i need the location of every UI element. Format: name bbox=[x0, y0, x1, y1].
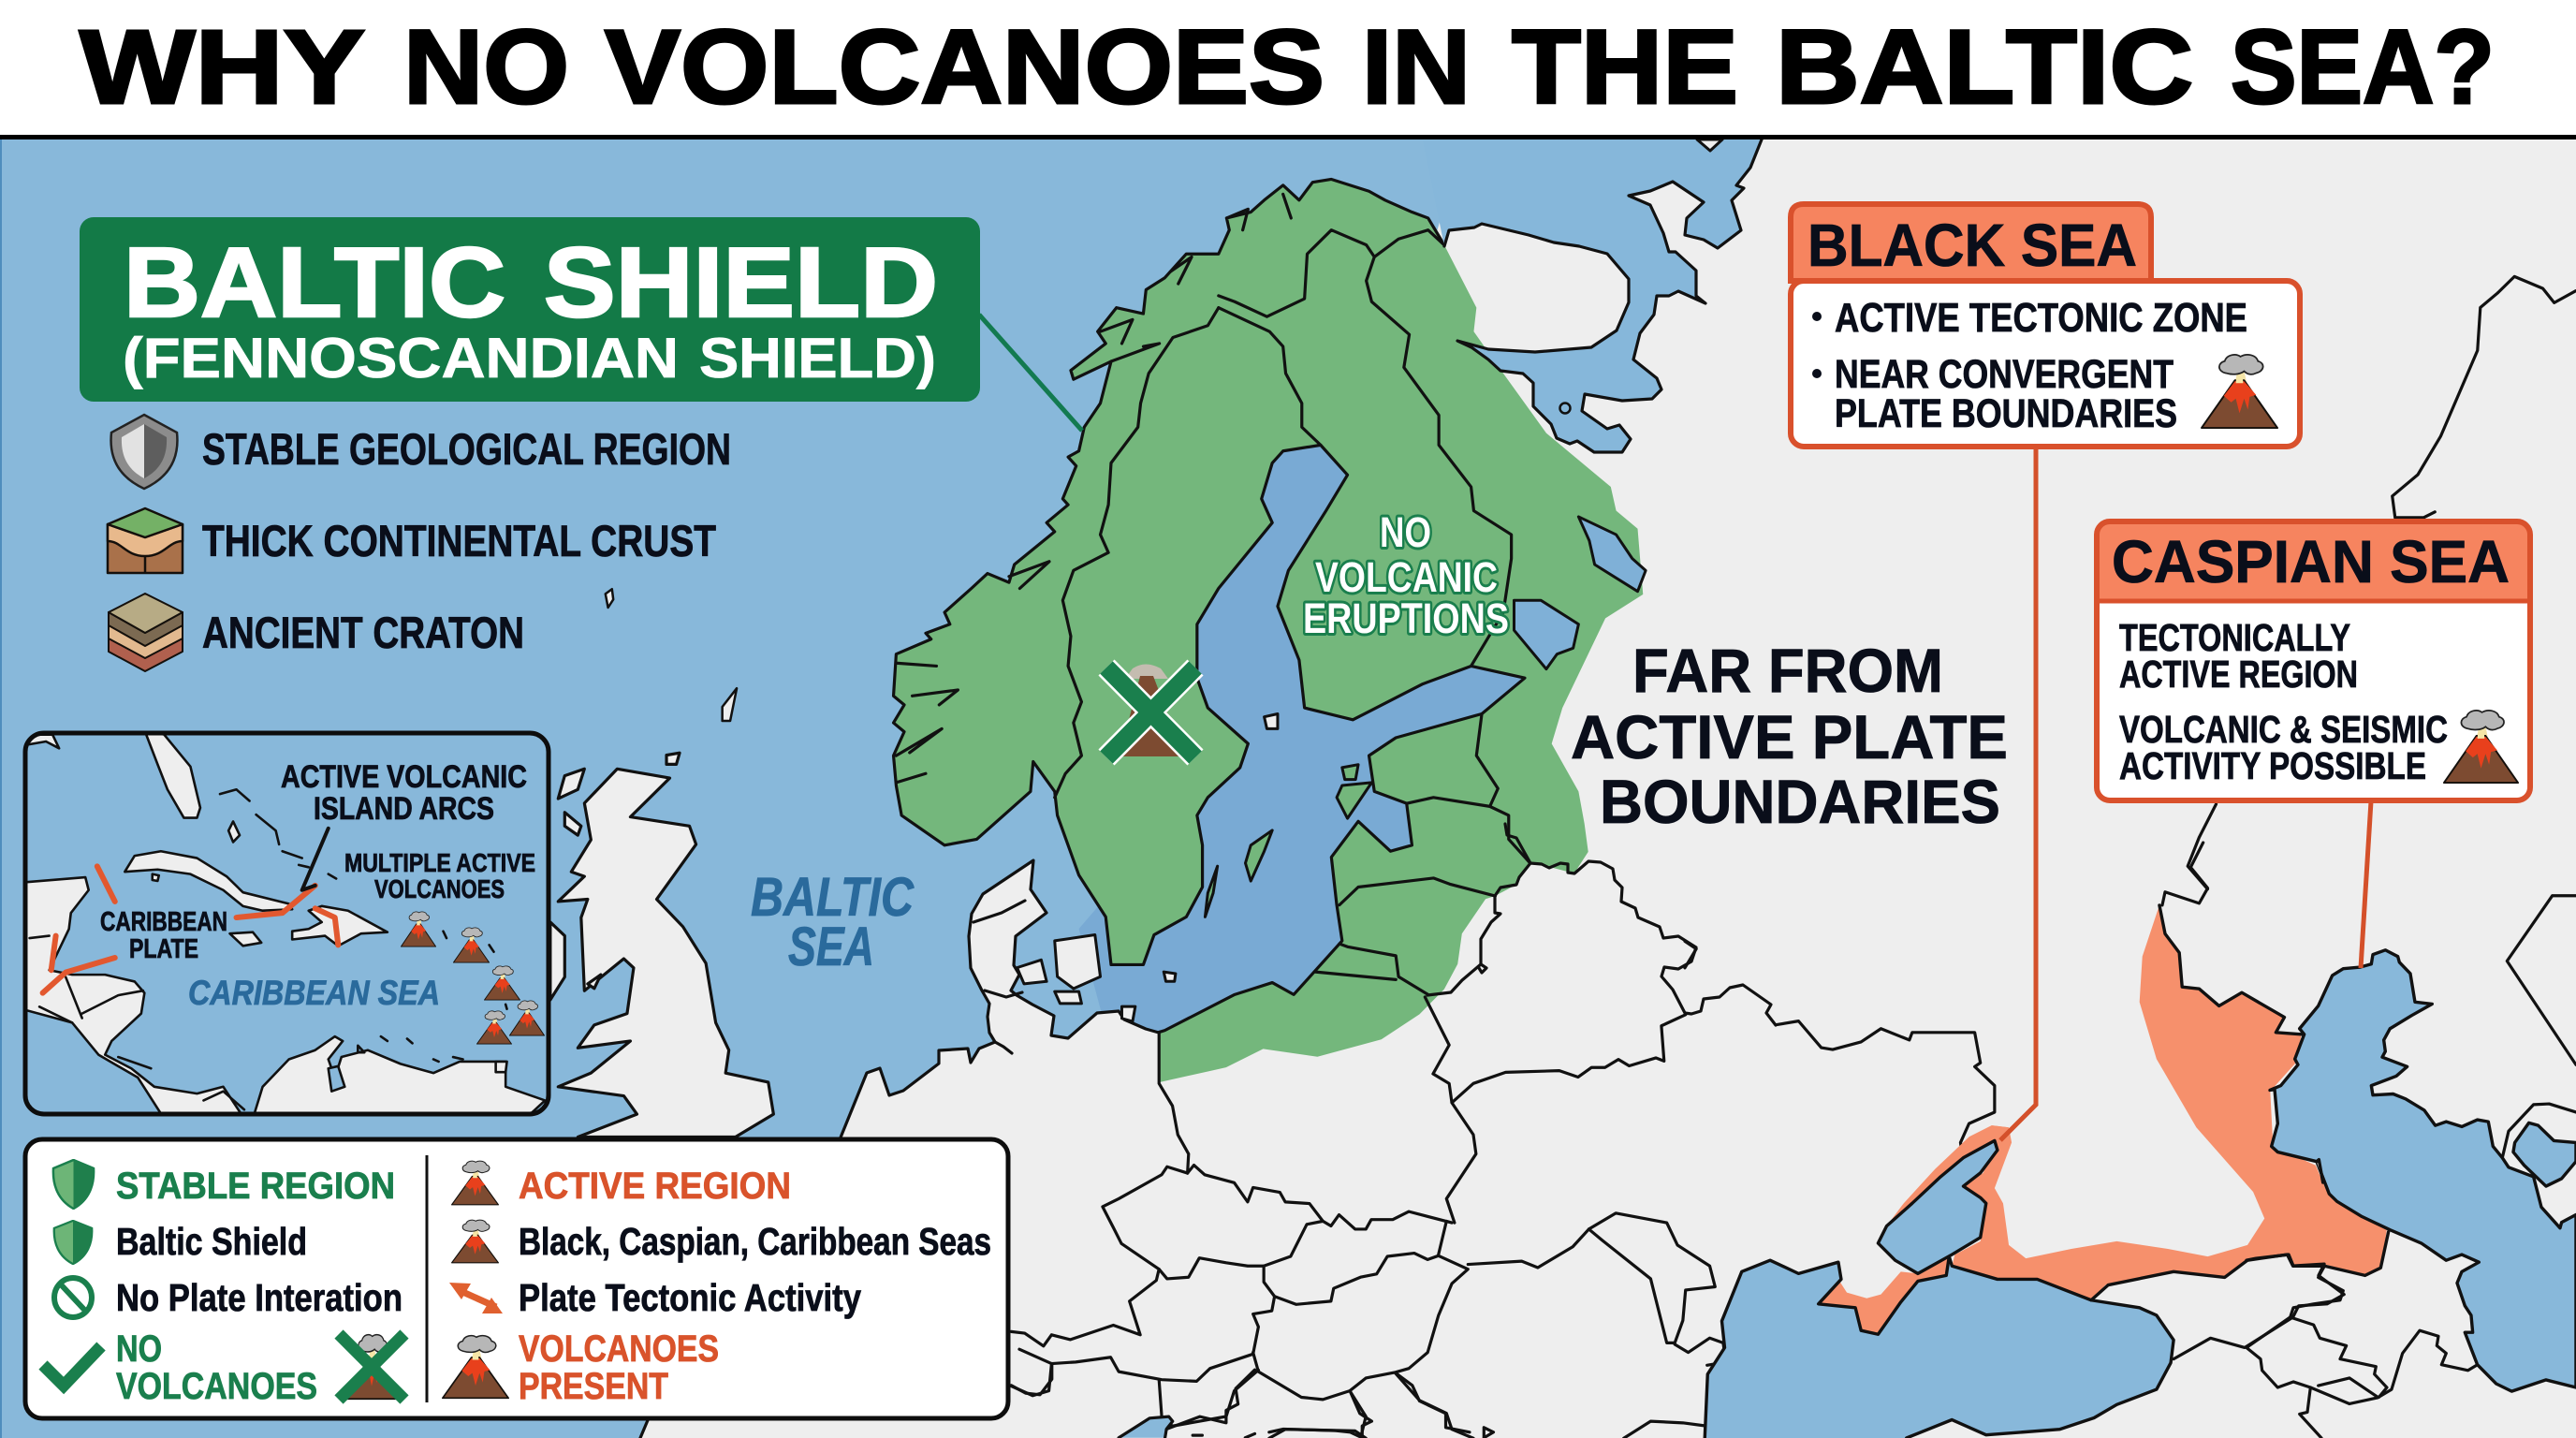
text: tectonically active region bbox=[2119, 616, 2358, 696]
inset: Caribbean land masses bbox=[13, 730, 545, 1119]
legend icon: plate tectonic arrow bbox=[449, 1283, 503, 1313]
inset: Caribbean plate label: PLATE bbox=[129, 934, 198, 964]
inset: Caribbean plate label: CARIBBEAN bbox=[100, 907, 227, 937]
legend icon: check mark bbox=[43, 1346, 101, 1386]
text: volcanic and seismic activity possible: VOLCANIC & SEISMIC bbox=[2119, 708, 2448, 751]
title bbox=[80, 8, 2495, 125]
panel: Caspian Sea callout bbox=[2097, 521, 2530, 800]
heading: Black Sea: BLACK SEA bbox=[1808, 212, 2137, 279]
map: Black and Caspian active zone in orange bbox=[1819, 905, 2387, 1334]
inset: Caribbean plate label bbox=[100, 907, 227, 964]
panel: Black Sea callout bbox=[1791, 204, 2300, 447]
leader: Caspian Sea callout bbox=[2361, 801, 2371, 968]
text: volcanic and seismic activity possible bbox=[2119, 708, 2448, 787]
label: no volcanic eruptions: NO bbox=[1380, 508, 1431, 556]
map: Caspian Sea bbox=[2247, 950, 2576, 1391]
map: Baltic Shield green region over Fennoscandia bbox=[894, 179, 1643, 1082]
label: Baltic Sea bbox=[751, 867, 915, 977]
inset: active volcanic island arcs label: ISLAND ARCS bbox=[314, 791, 494, 827]
legend text: no volcanoes bbox=[116, 1328, 317, 1407]
title: VOLCANOES bbox=[605, 8, 1325, 125]
legend icon: no sign bbox=[54, 1278, 92, 1317]
label: no volcanic eruptions bbox=[1303, 508, 1509, 642]
inset: plate boundaries in orange bbox=[43, 866, 338, 993]
map: islands in the Baltic bbox=[1017, 713, 1371, 1021]
connector: Baltic Shield label to Scandinavia bbox=[979, 315, 1082, 431]
legend text: seas: Black, Caspian, Caribbean Seas bbox=[519, 1220, 991, 1263]
icon: volcano bbox=[2202, 355, 2277, 428]
panel: Baltic Shield label bbox=[80, 217, 980, 402]
title: IN bbox=[1362, 8, 1471, 125]
icon: ancient craton block bbox=[109, 594, 183, 671]
text: volcanic and seismic activity possible: ACTIVITY POSSIBLE bbox=[2119, 744, 2426, 787]
title: SEA? bbox=[2231, 8, 2495, 125]
legend icon: large volcano bbox=[443, 1336, 508, 1398]
legend text: active region: ACTIVE REGION bbox=[519, 1166, 791, 1207]
icon: stable region shield bbox=[111, 415, 177, 489]
panel: Caribbean inset map bbox=[13, 730, 549, 1119]
map: Adriatic Sea bbox=[1119, 1416, 1173, 1438]
inset: volcano icons bbox=[401, 912, 545, 1044]
text: near convergent plate boundaries: NEAR CONVERGENT bbox=[1835, 352, 2174, 397]
legend icon: crossed volcano bbox=[339, 1334, 404, 1400]
map: lakes Ladoga and Onega bbox=[1515, 517, 1646, 669]
legend text: no volcanoes: VOLCANOES bbox=[116, 1366, 317, 1407]
map: coastlines and country borders bbox=[640, 179, 2576, 1438]
title: THE bbox=[1512, 8, 1738, 125]
legend text: plate tectonic activity: Plate Tectonic Activity bbox=[519, 1276, 861, 1319]
legend icon: Baltic Shield bbox=[54, 1221, 92, 1264]
header divider bbox=[0, 135, 2576, 139]
inset: frame bbox=[25, 733, 549, 1114]
map: Great Britain and Ireland bbox=[550, 753, 773, 1137]
inset: leader to island arcs bbox=[302, 829, 329, 890]
text: thick continental crust: THICK CONTINENTAL CRUST bbox=[202, 516, 716, 565]
legend icon: active volcano bbox=[452, 1161, 498, 1205]
legend icon: stable shield bbox=[53, 1160, 94, 1209]
label: Baltic Sea: BALTIC bbox=[751, 867, 915, 928]
inset: active volcanic island arcs label: ACTIVE VOLCANIC bbox=[281, 759, 527, 795]
title: WHY bbox=[80, 8, 365, 125]
small North Sea islands bbox=[606, 589, 737, 721]
legend text: stable region: STABLE REGION bbox=[116, 1166, 395, 1207]
legend text: volcanoes present: PRESENT bbox=[519, 1366, 668, 1407]
inset: active volcanic island arcs label bbox=[281, 759, 527, 827]
legend text: no plate interaction: No Plate Interation bbox=[116, 1276, 402, 1319]
panel: Baltic Shield label: SHIELD) bbox=[699, 327, 936, 389]
title: NO bbox=[403, 8, 569, 125]
inset: multiple active volcanoes label: VOLCANOES bbox=[374, 874, 505, 903]
text: ancient craton: ANCIENT CRATON bbox=[202, 608, 524, 657]
legend text: Baltic Shield: Baltic Shield bbox=[116, 1220, 307, 1263]
text: active tectonic zone: ACTIVE TECTONIC ZONE bbox=[1835, 295, 2247, 341]
text: near convergent plate boundaries: PLATE BOUNDARIES bbox=[1835, 391, 2177, 436]
icon: volcano bbox=[2444, 711, 2518, 783]
text: stable geological region: STABLE GEOLOGICAL REGION bbox=[202, 424, 731, 474]
callout: far from active plate boundaries: FAR FROM bbox=[1632, 636, 1943, 705]
label: no volcanic eruptions: VOLCANIC bbox=[1315, 553, 1498, 601]
panel: Baltic Shield label: BALTIC bbox=[124, 227, 505, 338]
panel: Baltic Shield label: SHIELD bbox=[544, 227, 938, 338]
inset: Caribbean Sea label: CARIBBEAN SEA bbox=[188, 974, 440, 1012]
heading: Caspian Sea: CASPIAN SEA bbox=[2112, 528, 2510, 595]
leader: Black Sea callout bbox=[2000, 448, 2036, 1140]
legend text: no volcanoes: NO bbox=[116, 1328, 162, 1370]
legend icon: volcano for seas bbox=[452, 1220, 498, 1263]
map: Barents and White Sea bbox=[1423, 139, 1762, 452]
header band bbox=[0, 0, 2576, 137]
text: tectonically active region: ACTIVE REGION bbox=[2119, 653, 2358, 696]
icon: continental crust block bbox=[108, 508, 183, 573]
label: no volcanic eruptions: ERUPTIONS bbox=[1303, 594, 1509, 642]
callout: far from active plate boundaries: BOUNDARIES bbox=[1600, 767, 2000, 836]
inset: multiple active volcanoes label: MULTIPLE ACTIVE bbox=[344, 848, 535, 877]
callout: far from active plate boundaries: ACTIVE PLATE bbox=[1571, 702, 2008, 771]
callout: far from active plate boundaries bbox=[1571, 636, 2008, 836]
map: continental land bbox=[640, 139, 2576, 1438]
legend text: volcanoes present bbox=[519, 1328, 719, 1407]
inset: multiple active volcanoes label bbox=[344, 848, 535, 903]
text: near convergent plate boundaries bbox=[1812, 352, 2177, 436]
map: Baltic Sea water tint bbox=[1079, 439, 1541, 1049]
panel: Baltic Shield label: (FENNOSCANDIAN bbox=[123, 327, 679, 389]
map: Black Sea with coast bbox=[1705, 905, 2324, 1438]
icon: crossed-out volcano on Sweden bbox=[1106, 665, 1195, 757]
label: Baltic Sea: SEA bbox=[788, 917, 874, 977]
legend text: volcanoes present: VOLCANOES bbox=[519, 1328, 719, 1370]
text: tectonically active region: TECTONICALLY bbox=[2119, 616, 2350, 659]
title: BALTIC bbox=[1776, 8, 2193, 125]
panel: legend bbox=[25, 1139, 1008, 1418]
